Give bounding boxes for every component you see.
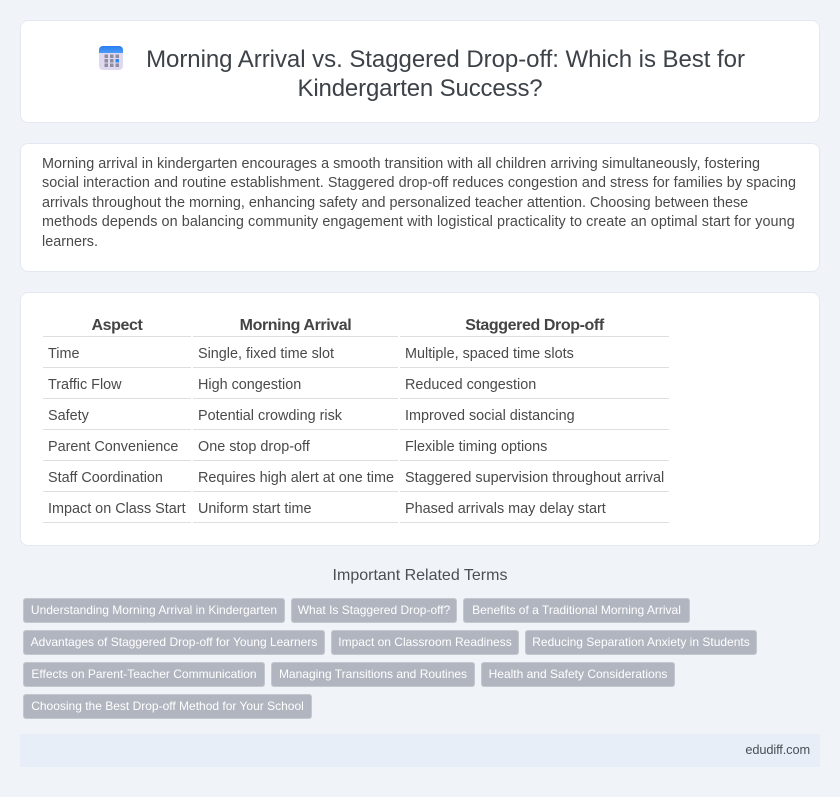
title: Morning Arrival vs. Staggered Drop-off: Which is Best for [146,46,745,73]
comparison table: Staff Coordination [48,470,163,486]
panel: comparison table [20,292,820,546]
panel: introduction [20,143,820,272]
icon: calendar [99,46,123,70]
related term tags [23,598,757,719]
comparison table: Improved social distancing [405,408,575,424]
text block: introduction [42,156,796,250]
heading: related terms: Important Related Terms [333,567,507,584]
related term tags: Advantages of Staggered Drop-off for Young Learners [31,635,317,649]
text block: introduction: social interaction and routine establishment. Staggered drop-off reduces congestion and stress for families by spacing [42,175,796,191]
table header: Aspect [92,317,142,334]
comparison table: Uniform start time [198,501,312,517]
text block: introduction: methods depends on balancing community engagement with logistical practicality to create an optimal start for young [42,214,795,230]
comparison table: Multiple, spaced time slots [405,346,574,362]
related term tags: Choosing the Best Drop-off Method for Your School [31,699,304,713]
comparison table: Impact on Class Start [48,501,186,517]
comparison table: High congestion [198,377,301,393]
text block: introduction: learners. [42,234,98,250]
comparison table: Single, fixed time slot [198,346,334,362]
footer: source: edudiff.com [745,742,810,757]
related term tags: Understanding Morning Arrival in Kindergarten [31,603,277,617]
comparison table: Traffic Flow [48,377,122,393]
title [146,46,745,102]
related term tags: Effects on Parent-Teacher Communication [31,667,257,681]
footer [20,734,820,767]
comparison table: Staggered supervision throughout arrival [405,470,664,486]
related term tags: Reducing Separation Anxiety in Students [532,635,750,649]
comparison table: Reduced congestion [405,377,536,393]
comparison table: Time [48,346,79,362]
related term tags: Impact on Classroom Readiness [338,635,512,649]
comparison table [43,317,669,523]
related term tags: Benefits of a Traditional Morning Arrival [472,603,681,617]
comparison table: One stop drop-off [198,439,310,455]
table header [92,317,604,334]
related term tags: Health and Safety Considerations [489,667,667,681]
table header: Morning Arrival [240,317,351,334]
text block: introduction: Morning arrival in kindergarten encourages a smooth transition with all children arriving simultaneously, fostering [42,156,760,172]
panel: title card [20,20,820,123]
text block: introduction: arrivals throughout the morning, enhancing safety and personalized teacher attention. Choosing between these [42,195,748,211]
comparison table: Requires high alert at one time [198,470,394,486]
comparison table: Parent Convenience [48,439,178,455]
related term tags: Managing Transitions and Routines [279,667,467,681]
comparison table: Flexible timing options [405,439,547,455]
comparison table: Phased arrivals may delay start [405,501,606,517]
table header: Staggered Drop-off [465,317,604,334]
related term tags: What Is Staggered Drop-off? [298,603,450,617]
comparison table: Safety [48,408,89,424]
title: Kindergarten Success? [298,75,542,102]
comparison table: Potential crowding risk [198,408,342,424]
